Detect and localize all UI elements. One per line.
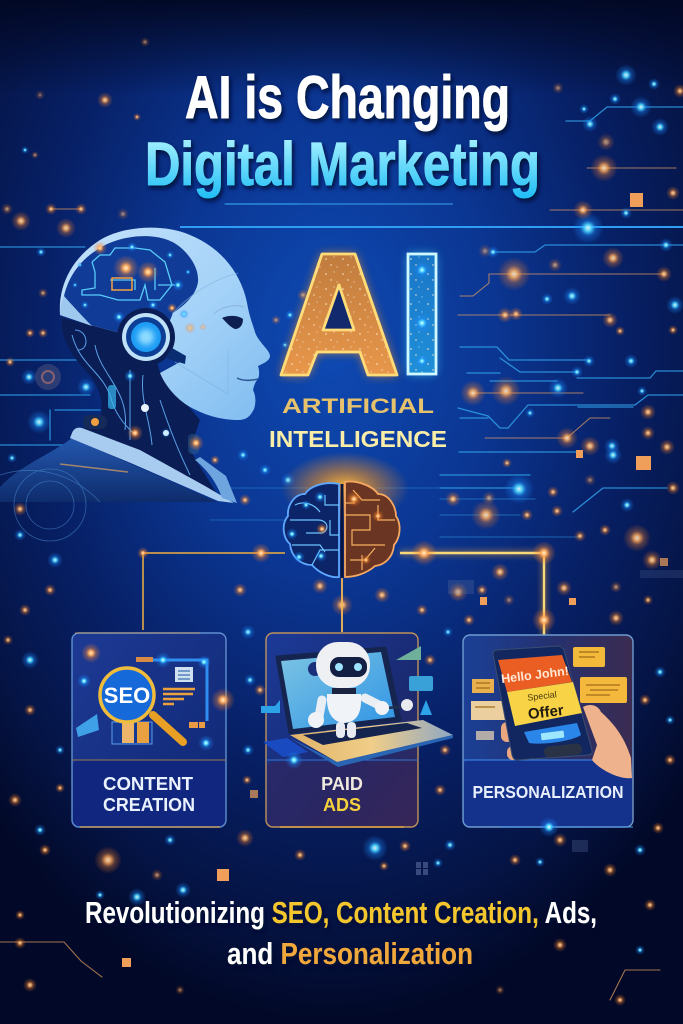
eye <box>222 316 243 329</box>
right lobe <box>345 482 400 577</box>
card label: CREATION <box>103 795 195 815</box>
bar chart <box>122 722 149 743</box>
footer line 2: and Personalization <box>227 936 473 971</box>
letter A <box>281 254 397 375</box>
label band <box>73 760 225 826</box>
title <box>145 64 540 198</box>
robot torso <box>327 694 361 723</box>
title line 1: AI is Changing <box>185 64 510 131</box>
main blue line <box>180 226 683 228</box>
sheet <box>263 738 308 757</box>
face seams <box>172 273 238 394</box>
phone <box>493 646 592 760</box>
sparkle dots <box>77 643 235 751</box>
ear dial <box>117 308 175 366</box>
magnifier: SEO <box>104 683 150 708</box>
robot <box>308 642 413 738</box>
subtitle: artificial intelligence: ARTIFICIAL <box>282 395 434 418</box>
robot arms <box>318 698 385 722</box>
neck <box>62 318 217 494</box>
head <box>60 228 270 420</box>
laptop screen <box>277 648 400 733</box>
face lights <box>179 309 207 334</box>
card label <box>321 774 363 815</box>
body <box>0 438 217 502</box>
faint pixel blocks <box>416 570 683 875</box>
phone: Offer <box>527 702 565 723</box>
card label: PERSONALIZATION <box>472 782 624 802</box>
small tag <box>76 714 99 737</box>
letter A hole <box>323 285 354 330</box>
card frame <box>266 633 418 827</box>
laptop base <box>290 720 453 762</box>
phone: Hello John! <box>500 664 570 686</box>
connector lines <box>137 540 556 640</box>
subtitle: artificial intelligence: INTELLIGENCE <box>269 426 447 452</box>
subtitle: artificial intelligence <box>269 395 447 452</box>
card label: PAID <box>321 774 363 794</box>
document icon <box>175 667 193 682</box>
side icons <box>261 646 433 715</box>
hand <box>583 705 632 778</box>
circuit brain <box>82 248 175 300</box>
big AI letters <box>281 254 436 375</box>
message bubbles <box>471 647 627 740</box>
card frame <box>463 635 633 827</box>
text lines <box>163 689 195 704</box>
footer line 1: Revolutionizing SEO, Content Creation, Ads, <box>85 895 597 930</box>
mouth <box>237 378 258 380</box>
temple light band <box>60 296 92 326</box>
glow <box>281 254 397 375</box>
phone: Special <box>527 689 557 703</box>
card frame <box>72 633 226 827</box>
label band <box>464 760 632 826</box>
card: personalization <box>463 635 633 837</box>
left lobe <box>284 483 339 577</box>
brain nodes <box>286 491 384 565</box>
title line 2: Digital Marketing <box>145 130 540 198</box>
card: content creation <box>72 633 235 827</box>
neck nodes <box>83 370 204 454</box>
fingers left <box>501 722 513 742</box>
ring marker <box>35 364 61 390</box>
shoulder rings <box>0 469 100 541</box>
robot head illustration <box>0 228 270 541</box>
letter I <box>408 254 436 374</box>
card label <box>103 774 195 815</box>
neck wires <box>72 330 190 475</box>
card: paid ads <box>261 633 453 827</box>
robot head <box>308 662 322 676</box>
brain icon <box>281 452 409 578</box>
screen outline <box>137 660 207 721</box>
orange square nodes <box>122 193 668 967</box>
keyboard <box>303 723 422 745</box>
magnifier <box>100 668 183 742</box>
collar <box>70 428 234 503</box>
skull panel <box>62 236 198 345</box>
footer tagline <box>85 895 597 971</box>
card label: CONTENT <box>103 774 193 794</box>
card label: ADS <box>323 795 361 815</box>
